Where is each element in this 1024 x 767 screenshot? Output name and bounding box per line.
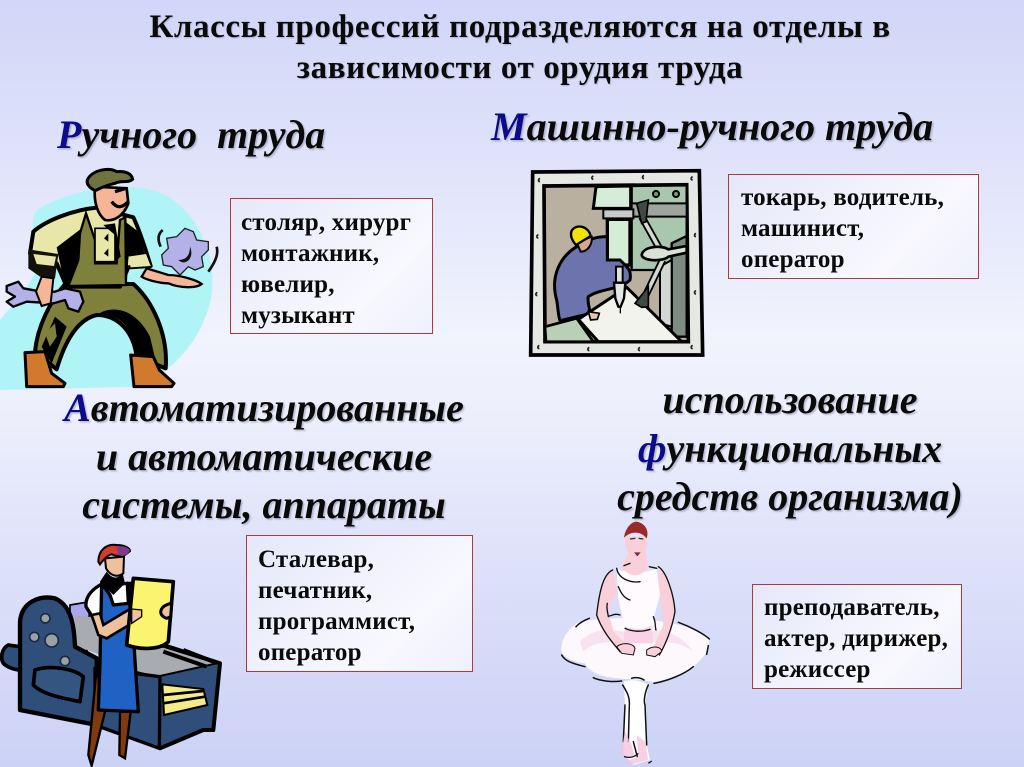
tutu outlines bbox=[562, 618, 709, 683]
box: machine-manual professions bbox=[728, 174, 979, 279]
title: Классы профессий подразделяются на отделы в bbox=[149, 9, 891, 45]
box: machine-manual professions: машинист, bbox=[741, 215, 864, 242]
arm bbox=[92, 610, 142, 638]
left hand bbox=[36, 277, 53, 306]
heading: manual labour: Ручного труда bbox=[57, 112, 325, 157]
illustration: ballerina bbox=[560, 522, 710, 765]
box: automated professions: печатник, bbox=[258, 577, 372, 604]
illustration: worker with wrench and gear bbox=[0, 168, 219, 390]
box: automated professions bbox=[246, 535, 473, 672]
head bbox=[105, 557, 124, 576]
head bbox=[95, 187, 128, 220]
box: functional professions: преподаватель, bbox=[764, 594, 940, 621]
paper tray bbox=[162, 684, 207, 715]
window bbox=[544, 185, 688, 342]
shoes bbox=[621, 732, 648, 765]
box: manual professions: монтажник, bbox=[241, 240, 379, 267]
legs bbox=[623, 680, 650, 765]
box: manual professions bbox=[230, 198, 433, 334]
heading: functional means bbox=[617, 377, 963, 520]
head bbox=[625, 537, 647, 560]
neck and chest bbox=[622, 552, 648, 575]
box: functional professions bbox=[752, 584, 962, 689]
title: зависимости от орудия труда bbox=[297, 50, 743, 86]
cap bbox=[98, 545, 130, 564]
hand bbox=[588, 312, 599, 320]
shirt bbox=[86, 583, 132, 632]
machine controls bbox=[41, 614, 50, 623]
box: functional professions: актер, дирижер, bbox=[764, 625, 948, 652]
heading: machine-manual labour: Машинно-ручного труда bbox=[491, 104, 933, 149]
tutu bbox=[561, 618, 709, 682]
machine background bbox=[632, 185, 687, 270]
title bbox=[149, 9, 891, 86]
operator face bbox=[577, 237, 592, 252]
heading: automated systems: Автоматизированные bbox=[64, 385, 464, 430]
rivets bbox=[536, 175, 696, 351]
legs bbox=[88, 668, 131, 766]
icon: wrench bbox=[7, 282, 83, 312]
machine side bbox=[130, 645, 220, 748]
box: machine-manual professions: оператор bbox=[741, 246, 845, 273]
heading: automated systems: системы, аппараты bbox=[82, 482, 446, 527]
box: automated professions: Сталевар, bbox=[258, 546, 374, 573]
machine main body bbox=[20, 598, 97, 725]
helmet bbox=[571, 226, 591, 245]
shirt bbox=[30, 208, 151, 287]
illustration: printer with press bbox=[0, 544, 222, 767]
heading: automated systems: и автоматические bbox=[96, 434, 432, 478]
right arm bbox=[142, 268, 202, 287]
box: machine-manual professions: токарь, водитель, bbox=[741, 184, 944, 211]
operator body bbox=[555, 237, 630, 321]
torso bbox=[617, 568, 660, 628]
cap bbox=[87, 169, 133, 191]
box: manual professions: столяр, хирург bbox=[241, 209, 411, 236]
icon: gear bbox=[162, 228, 208, 275]
paper sheet bbox=[127, 578, 173, 648]
illustration: machine operator in frame bbox=[528, 168, 705, 357]
heading: functional means: средств организма) bbox=[617, 474, 963, 519]
box: manual professions: музыкант bbox=[241, 302, 355, 329]
box: manual professions: ювелир, bbox=[241, 271, 335, 298]
apron bbox=[98, 583, 138, 712]
heading: automated systems bbox=[62, 385, 465, 528]
box: automated professions: программист, bbox=[258, 608, 415, 635]
icon: cyan blob background bbox=[0, 187, 212, 390]
other hand bbox=[161, 603, 172, 618]
hands bbox=[617, 644, 662, 657]
arms bbox=[597, 570, 633, 653]
box: automated professions: оператор bbox=[258, 639, 362, 666]
box: functional professions: режиссер bbox=[764, 656, 871, 683]
heading: functional means: функциональных bbox=[638, 426, 942, 470]
lever arms bbox=[642, 217, 664, 297]
frame bbox=[531, 171, 703, 355]
work table bbox=[578, 287, 682, 342]
legs bbox=[35, 284, 166, 369]
overall bib bbox=[68, 213, 126, 286]
boots bbox=[25, 352, 65, 387]
drill bbox=[616, 267, 623, 283]
heading: functional means: использование bbox=[663, 377, 917, 422]
